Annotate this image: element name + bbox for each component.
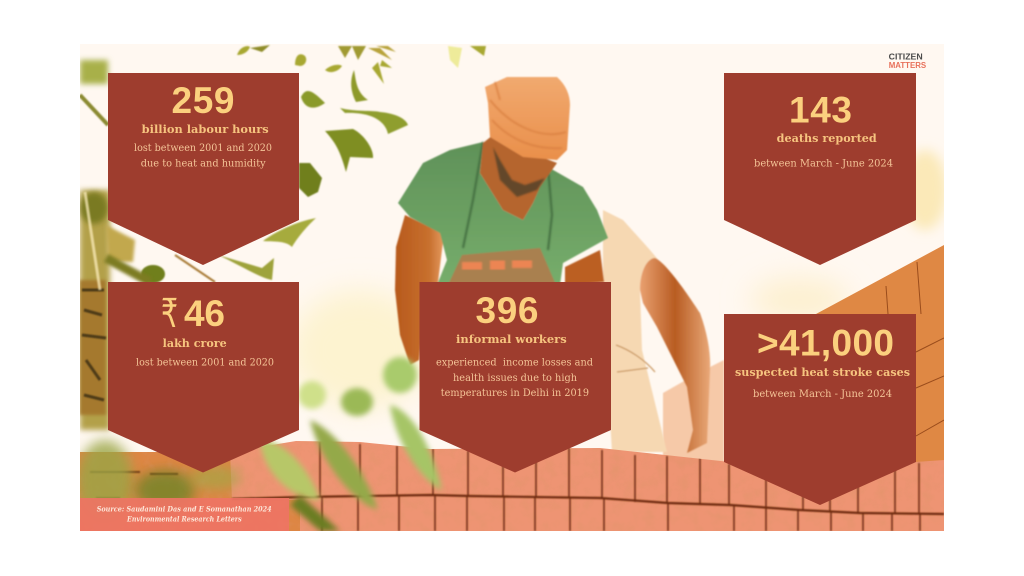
main worker	[395, 77, 608, 365]
background photo: workers and bricks	[77, 44, 947, 531]
second worker	[603, 210, 710, 453]
description	[134, 143, 272, 170]
bricks	[80, 440, 944, 531]
number: ₹	[161, 291, 178, 337]
arms	[395, 215, 444, 365]
number	[161, 291, 225, 337]
neck and face	[480, 135, 557, 220]
label: lakh crore	[163, 337, 227, 350]
panel: 259 billion labour hours	[108, 73, 299, 265]
description: health issues due to high	[453, 373, 578, 384]
description: lost between 2001 and 2020	[136, 358, 274, 369]
logo: Citizen Matters: CITIZEN	[889, 52, 923, 62]
description: experienced income losses and	[436, 358, 594, 369]
description: lost between 2001 and 2020	[134, 143, 272, 154]
panel: 396 informal workers	[420, 282, 611, 472]
foliage top centre	[237, 45, 486, 247]
sloped brick wall on right	[816, 245, 944, 470]
label: billion labour hours	[142, 123, 269, 136]
description: due to heat and humidity	[141, 159, 266, 170]
faded wall behind worker	[663, 360, 724, 470]
number: 46	[184, 293, 225, 334]
number: >41,000	[757, 323, 894, 364]
source text	[97, 505, 272, 524]
description: temperatures in Delhi in 2019	[441, 388, 589, 399]
logo: Citizen Matters	[889, 52, 927, 70]
number: 396	[476, 290, 538, 331]
turban	[485, 77, 570, 160]
number: 143	[789, 90, 852, 131]
panel: 46 lakh crore	[108, 282, 299, 472]
shirt	[398, 142, 608, 285]
label: informal workers	[456, 333, 567, 346]
source text: Source: Saudamini Das and E Somanathan 2024	[97, 505, 272, 514]
foliage left edge	[80, 60, 274, 430]
description: between March - June 2024	[753, 389, 892, 400]
source box	[80, 498, 289, 531]
panel: 41,000 suspected heat stroke cases	[724, 314, 916, 505]
label: suspected heat stroke cases	[735, 366, 910, 379]
description: between March - June 2024	[754, 159, 893, 170]
panel: 143 deaths reported	[724, 73, 916, 265]
logo: Citizen Matters: MATTERS	[889, 61, 927, 70]
source text: Environmental Research Letters	[126, 515, 242, 524]
number: 259	[172, 80, 234, 121]
description	[436, 358, 594, 399]
foliage bottom blurred	[77, 357, 442, 531]
label: deaths reported	[777, 132, 877, 145]
